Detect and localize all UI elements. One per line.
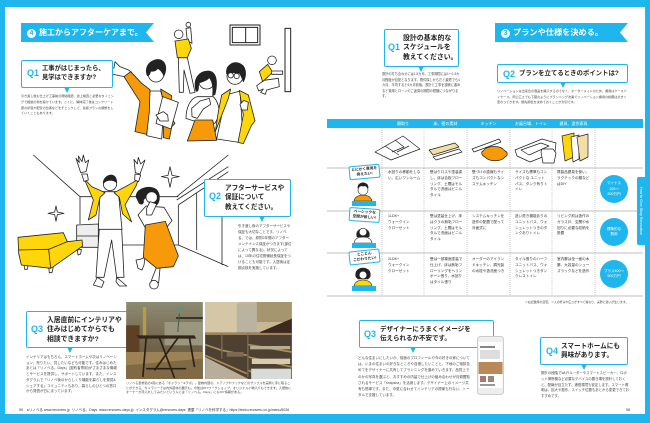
cell [388, 214, 410, 230]
cell: サイズも標準もコンパクトな ユニットバス、タンク有りトイレ [515, 170, 547, 191]
speech label 3: とことん [357, 251, 372, 257]
Q2 label: Q2 [209, 191, 221, 201]
Q3 title [47, 316, 122, 343]
Q1 title [403, 34, 458, 61]
price badge: minus: マイナス [607, 181, 621, 185]
col header: 床、壁の素材 [434, 121, 458, 126]
question box: Q4 [540, 337, 628, 365]
question box: left Q2 [204, 179, 291, 217]
photo caption: リノベる表参道の1階にある「ギャラリー&ラボ」。建物内部の、ドアノブやフックなどのサンプルを実際に手に取ることができる。ギャラリーでは内外装材の展示も。今後はDIYワークショップ、オリジナル小物入りもできます。入居後にオーナーが手入れしてみたいという人には「リノベる。Days」にもDIY情報がある。 [126, 381, 291, 394]
cell [388, 257, 410, 273]
side tab [637, 177, 645, 245]
pointer [260, 217, 264, 222]
Q1 title: 教えてください。 [403, 54, 458, 61]
speech label 1: 抑えたい! [357, 171, 373, 177]
right Q3 answer text: どんな住まいにしたいか、前面のプロフィールや今の好きの家については、いまの住まいの好きなところや自慢したいことと、下地のご相談含めてをデザイナーに共有してプランニングを進めていきます。品質上でのかの写真を選ぶと、おすすめの内装で仕上げの組み合わせが月費閲覧されるサービス「snapsha」を活用します。デザイナー上のイメージ共有も簡単です。また、今夏に合わせてインテリアの提案も行ない、トータルで支援しています。 [358, 356, 470, 397]
speech label 3 [348, 248, 381, 266]
cell: クローゼット [388, 269, 410, 273]
speech label 2: ベーシックな [354, 209, 376, 215]
Q3 label: Q3 [364, 328, 376, 338]
price badge: plus: プラス400〜 [604, 268, 624, 272]
cell: 壁づけの直線もサイズもコンパクトなシステムキッチン [472, 170, 504, 186]
illustration: construction site visit [113, 22, 292, 144]
question box: left Q1 [21, 60, 113, 88]
Q4 answer text: 設計の段階でWi-Fiルーターやスマートスピーカー、ロボット掃除機など必要なデバイスの置き場を設計しておくと、配線が目立たず、通信環境も安定します。スマート照明は、拡大や振作、スイッチ位置もあとから変更できておすすめです。 [541, 371, 629, 398]
table text [388, 121, 590, 284]
question box: right Q2 [497, 64, 628, 83]
Q4 label: Q4 [546, 346, 558, 356]
Q1 title: 設計の基本的な [403, 34, 451, 42]
Q3 title: デザイナーにうまくイメージを [380, 326, 471, 332]
speech label 1: とにかく費用を [351, 166, 377, 172]
price badge: standard: 費用 [610, 232, 618, 236]
cell: 追い焚き機能ありのユニットバス、ウォシュレットつきのタンクありトイレ [515, 214, 547, 235]
price badge: standard: 標準的な [607, 226, 621, 230]
step number icon: 3 [504, 30, 507, 36]
price badge: plus: 500万円 [607, 274, 621, 278]
comparison table [327, 119, 643, 304]
Q3 label: Q3 [31, 324, 43, 334]
Q3 title: 伝えられるか不安です。 [380, 335, 451, 342]
section banner 4 [21, 23, 154, 42]
cell: システムキッチンを造作の配置で配って対面式に [472, 214, 504, 230]
Q1 title: 見学はできますか? [42, 74, 96, 80]
price badge: plus [600, 260, 628, 288]
Q1 title: 工事がはじまったら、 [42, 65, 105, 72]
Q1 label: Q1 [27, 68, 39, 78]
cell: 1LDK+ [388, 214, 399, 218]
question box: right Q1 [384, 29, 459, 67]
pointer [64, 88, 70, 93]
right Q2 answer text: リノベーションは出来合の商品を購入するのでなく、オーダーメイドのため、費用はケースバイケース。同じ広さでも下図のようにプランニング次第でリノベーション費用の総額は大きく変わってきます。優先順位を決めておくことが大切です。 [497, 89, 627, 104]
cell: 壁は一部薬面塗装で仕上げ、床は無垢フローリングをヘリンボーン張り、水回りはタイル張り [430, 257, 462, 284]
pointer [410, 348, 416, 353]
left Q3 answer text: インテリアはもちろん、スマートホームや次はリノベーション、売りたい、貸したいなども可能です。住みはじめたあとは「リノベる。Days」(契約者専用)がさまざまな情報とサービスを提供し、サポートしています。また、インスタグラムで「リノベ後のからしくり機能を募らしを発見&シェアする」コミュニティもあり、暮らしのひとつの窓口から発信が日にまっています。 [26, 355, 117, 393]
section banner 3 [495, 23, 628, 42]
cell: クローゼット [388, 226, 410, 230]
left Q2 answer text: 引き渡し後のアフターサービスや保証も大切なことです。リノベる。では、原則2年間のアフターメンテナンス保証がつきます(部位によって異なる)。状況によっては、10年の住宅設備延長保証をつけることも可能です。入居後は定期点検を実施しています。 [238, 224, 292, 270]
Q2 title: プランを立てるときのポイントは? [519, 70, 619, 77]
Q3 title: 相談できますか? [47, 336, 99, 343]
step number icon [501, 28, 510, 38]
Q2 label: Q2 [503, 68, 515, 78]
page number: 58 [626, 408, 630, 412]
price badge: minus [600, 175, 628, 203]
banner heading: プランや仕様を決める。 [513, 28, 603, 37]
table footnote: ※右記費用の目安。※人の好みや広さがすべて異なり、実際に違いが生じます。 [525, 300, 628, 304]
Q1 title: スケジュールを [403, 44, 451, 51]
cell: リビング前は造作のガラス戸、玄関や水回りに必要な収納を設置 [557, 214, 589, 235]
col header: 間取り [397, 121, 409, 126]
col header: お風呂場、トイレ [515, 121, 547, 126]
price badge: minus: 200万円 [607, 192, 621, 196]
phone mockup [477, 336, 504, 395]
cell: 水回りの移動をしない、広いワンルーム [388, 170, 420, 180]
Q2 title: 保証について [225, 194, 264, 201]
speech label 1 [348, 164, 381, 180]
Q4 title: スマートホームにも [561, 342, 620, 350]
col header: 建具、造作家具 [560, 121, 588, 126]
cell: ウォークイン [388, 220, 410, 224]
speech label 3: こだわりたい! [353, 256, 377, 262]
footer left: 59 ●リノベる www.renoveru.jp リノベる。Days www.renoveru-days.jp インスタグラム@renoveru.days 連載「リノベを科学する」https://tecto.renoveru.co.jp/menu/5026 [19, 408, 289, 412]
row labels [348, 164, 380, 266]
speech label 2 [349, 207, 380, 223]
cell: ウォークイン [388, 263, 410, 267]
Q4 title: 興味があります。 [561, 352, 613, 359]
cell: 室内扉は全一面の木扉、大容量のシューズラックなどを造作 [557, 257, 589, 273]
Q1 title [42, 64, 105, 80]
cell: 壁は塗装仕上げ、床はクラの無垢フローリング、土間はモルタルで洗面はビニルタイル [430, 214, 462, 241]
cell: タイル張りのハーフユニットバス、ウォシュレットつきタンクレストイレ [515, 257, 547, 278]
col header: キッチン [480, 121, 496, 126]
step number icon [27, 28, 36, 38]
Q2 title: アフターサービスや [225, 184, 284, 192]
Q3 title: 住みはじめてからでも [47, 326, 115, 333]
cell: 既製品建具を使い、ラクテックの棚などはDIY [557, 170, 589, 186]
speech label 2: 空間が欲しい! [353, 214, 376, 220]
pointer [418, 67, 424, 72]
pointer [560, 83, 566, 88]
left Q1 answer text: 引き渡し後も仕上げ工事前の現場確認、途上検査と必要なタイミングで相談の場を設けています。とくに、解体完了後はコンクリート部の状態や配管の位置などをチェックして、最終プランの調整をしていくこともあります。 [21, 94, 114, 115]
Q2 title [225, 184, 284, 210]
right Q1 answer text: 設計の打ち合わせには1.5カ月、工事期間には1〜1.5カ月程度が目安となります。物件探しからだと最短でも4カ月、平均すると6カ月前後。設計と工事を連続に進めると費用とローンのご返済の期間の短縮につながります。 [382, 72, 460, 98]
question box: left Q3 [26, 311, 135, 348]
persona icons [352, 182, 376, 291]
cell: オーダーのアイランドキッチン、調光製の水栓や造洗面つき [472, 257, 504, 273]
photo: shop shelves [205, 302, 292, 379]
price badge: standard [600, 218, 628, 246]
Q1 label: Q1 [388, 42, 400, 52]
photo: studio with table [126, 302, 203, 379]
cell: 2LDK+ [388, 257, 399, 261]
pointer [68, 348, 72, 353]
banner heading: 施工からアフターケアまで。 [39, 28, 143, 37]
price badge: minus: 100〜 [609, 186, 619, 190]
question box: right Q3 [359, 320, 494, 348]
Q2 title: 教えてください。 [225, 204, 277, 210]
pointer [582, 365, 586, 370]
step number icon: 4 [30, 30, 33, 36]
Q3 title: 入居直前にインテリアや [47, 316, 122, 324]
illustration: happy couple in finished room [18, 154, 228, 290]
Q3 title [380, 325, 471, 342]
cell: 壁はクロスや塗装梁し、床は合板フローリング、土間はモルタルで洗面はビニルタイル [430, 170, 462, 197]
side tab label: How to Give Shop Renovation [639, 187, 643, 235]
Q4 title [561, 342, 620, 359]
